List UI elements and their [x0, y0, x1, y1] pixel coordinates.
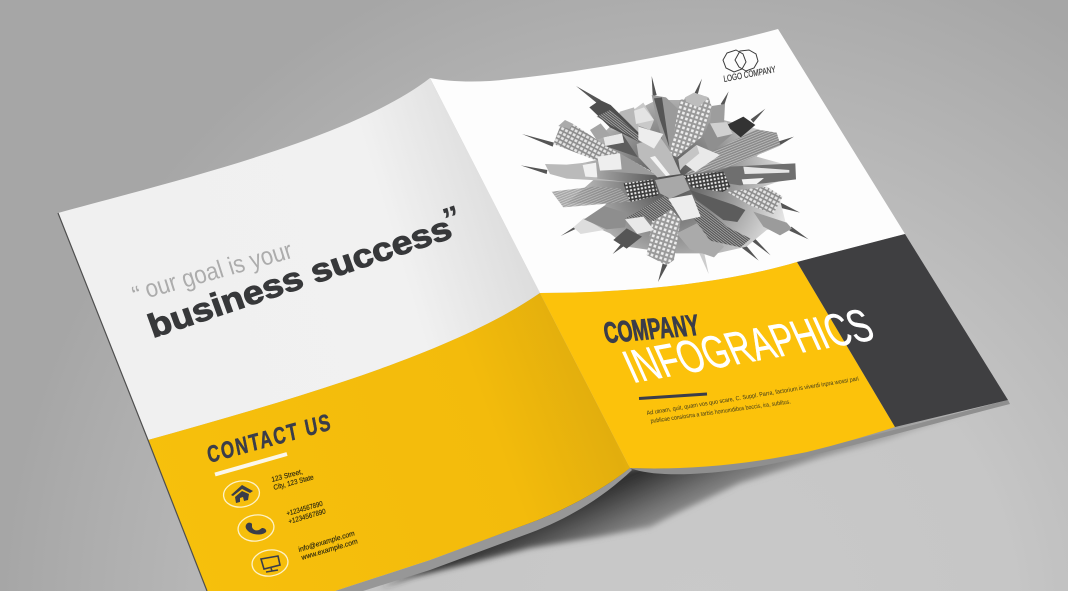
illustration: exploding city — [521, 76, 809, 282]
phone text: +1234567890 — [288, 506, 326, 526]
left page white area — [58, 78, 540, 440]
left page — [58, 78, 630, 591]
buildings: inner ring — [583, 107, 745, 234]
buildings: outer ring — [545, 93, 796, 265]
right page dark panel — [797, 234, 1008, 427]
icon: home — [222, 479, 261, 509]
icon: monitor — [250, 548, 290, 578]
page stack: left page edge — [335, 468, 632, 591]
phone text — [286, 499, 326, 526]
email and web text: www.example.com — [300, 536, 358, 562]
contact underline — [215, 454, 287, 474]
left page outer edge — [58, 213, 207, 591]
text: business success: business success — [143, 209, 456, 345]
body text: publicae consiosrra a tarbis homumdibus boccis, ira, sublitus. — [650, 398, 792, 425]
address text: 123 Street, — [271, 467, 303, 484]
contact block — [205, 409, 358, 578]
quote: business success — [143, 199, 465, 345]
accent bar — [639, 394, 707, 398]
spires — [521, 76, 809, 282]
heading: contact us: CONTACT US — [205, 409, 333, 469]
address text: City, 123 State — [273, 472, 314, 492]
heading: infographics: INFOGRAPHICS — [615, 299, 881, 392]
email and web text: info@example.com — [298, 528, 355, 554]
heading: company: COMPANY — [601, 309, 703, 350]
icon: overlapping octagons — [723, 50, 758, 72]
right page yellow area — [540, 262, 895, 468]
left page yellow area — [148, 293, 630, 591]
opening quote mark: “ — [129, 281, 146, 310]
page stack: right page edge — [630, 400, 1010, 474]
text: logo company: LOGO COMPANY — [723, 64, 776, 84]
city underlay mass — [550, 100, 793, 253]
text: our goal is your: our goal is your — [141, 236, 296, 304]
right page white area — [430, 29, 905, 293]
logo — [723, 50, 776, 84]
quote: our goal is your — [129, 236, 296, 310]
phone text: +1234567890 — [286, 499, 323, 518]
closing quote mark: ” — [439, 199, 465, 240]
right page — [430, 29, 1008, 468]
icon: phone — [236, 513, 276, 543]
cast shadow under right page — [380, 400, 1000, 588]
body text: Ad utnam, quit, quam vos quo scare, C. Suppl. Parra, factorium is viverdi inpra wossi pari — [646, 376, 859, 417]
